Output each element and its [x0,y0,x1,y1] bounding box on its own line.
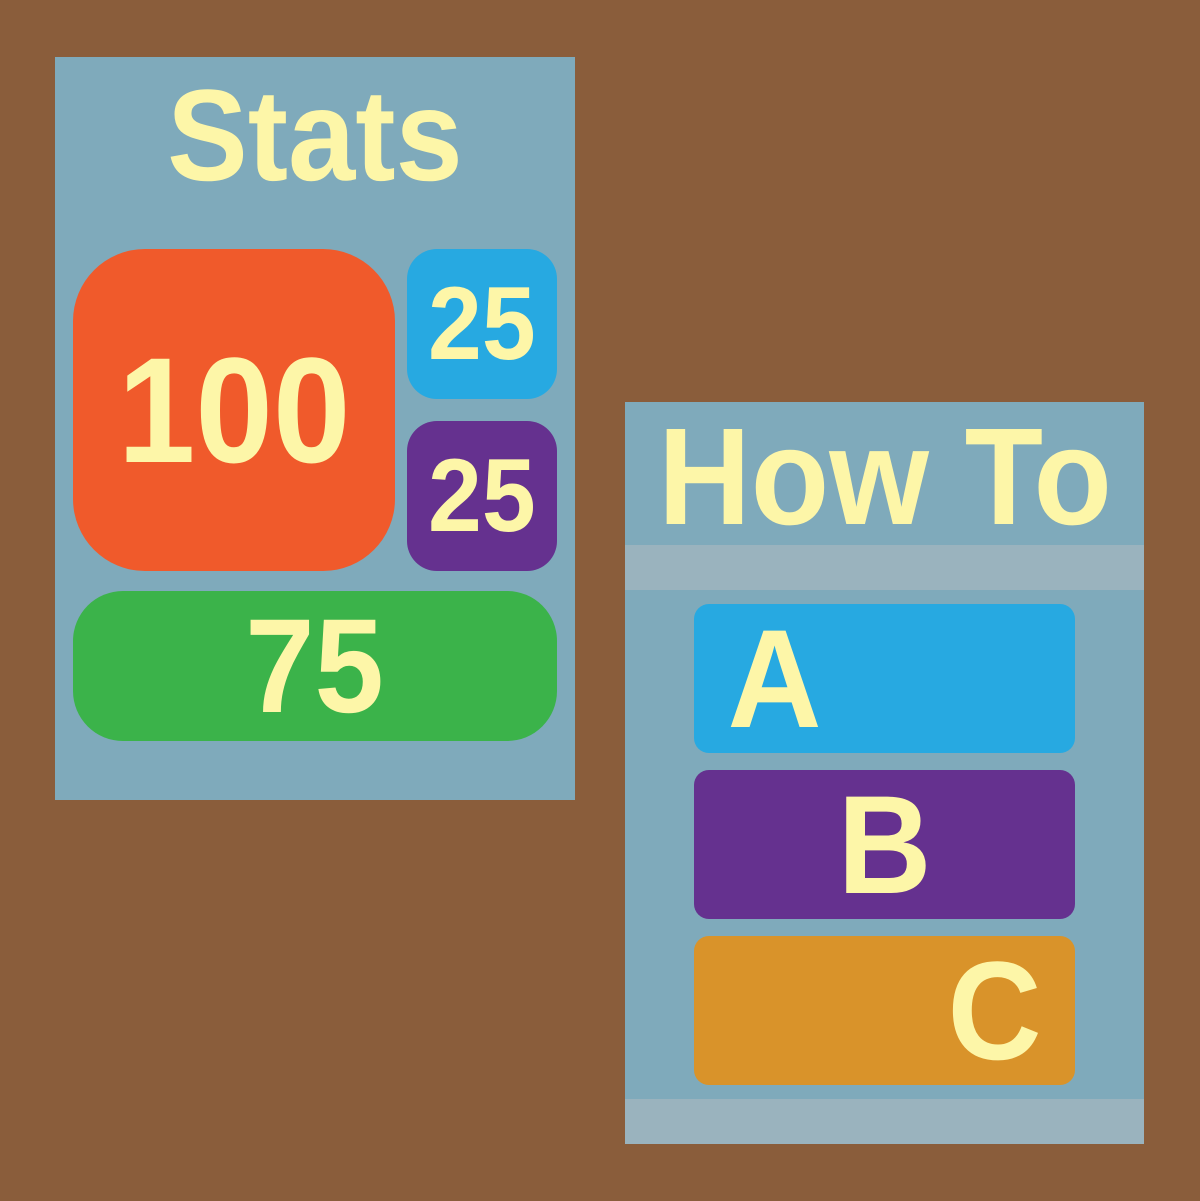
panel: stats [55,57,575,800]
heading: How To: How To [658,400,1111,554]
heading: Stats: Stats [167,62,463,208]
stat: 25 blue [407,249,557,399]
step B [694,770,1075,919]
band bottom [625,1099,1144,1144]
stat: 100 [73,249,395,571]
stat: 25 purple: 25 [428,438,536,554]
stat: 75 [73,591,557,741]
panel: how to [625,402,1144,1144]
stat: 25 purple [407,421,557,571]
stat: 25 blue: 25 [428,266,536,382]
stat: 75: 75 [246,592,384,740]
step C [694,936,1075,1085]
step A: A [728,600,822,756]
step C: C [947,932,1041,1088]
stat: 100: 100 [118,326,350,494]
step B: B [837,766,932,922]
band top [625,545,1144,590]
step A [694,604,1075,753]
